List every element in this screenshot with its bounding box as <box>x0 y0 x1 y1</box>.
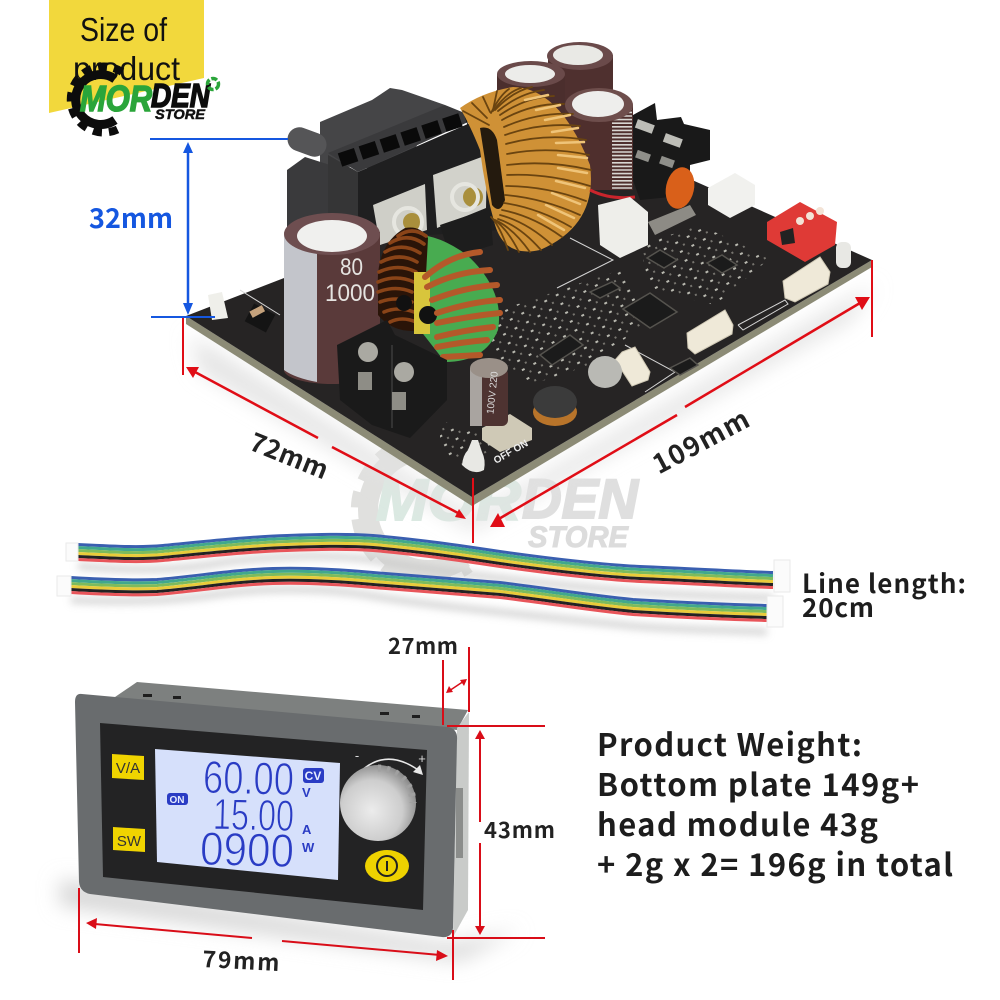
rear terminal block <box>633 103 710 200</box>
white connector with red wire <box>590 190 648 258</box>
small aluminium capacitor <box>588 356 622 388</box>
SW button <box>113 827 145 852</box>
V/A button: V/A <box>116 760 140 777</box>
dimension: 79mm width <box>79 888 453 980</box>
white connectors <box>615 257 830 386</box>
ribbon cables <box>57 534 790 632</box>
nylon standoffs <box>208 242 851 472</box>
label: size of product: product <box>73 50 180 87</box>
watermark: Morden Store: STORE <box>528 521 629 554</box>
LCD readouts: A <box>302 822 312 837</box>
DIP switch <box>767 202 837 262</box>
heatsink <box>284 88 500 240</box>
inductor <box>533 386 577 426</box>
green toroid inductor <box>378 227 500 362</box>
dimension: 43mm height <box>447 726 555 938</box>
silkscreen outlines <box>240 238 788 392</box>
rear housing <box>115 682 468 730</box>
board edge <box>186 260 872 506</box>
text: line length: Line length: <box>802 564 966 601</box>
label: size of product: Size of <box>80 11 168 48</box>
LCD readouts: CV <box>305 769 321 783</box>
LCD readouts: V <box>302 785 311 800</box>
big copper toroid <box>460 87 591 252</box>
MOSFET tabs <box>373 155 493 258</box>
board top surface <box>186 148 872 497</box>
brown small capacitor: 100V 220 <box>485 371 501 415</box>
SMD resistors <box>648 205 696 235</box>
logo: Morden Store: DEN <box>151 77 211 114</box>
text: product weight: + 2g x 2= 196g in total <box>597 840 953 885</box>
slide switch: OFF ON <box>492 438 530 467</box>
watermark: Morden Store <box>355 438 640 582</box>
dimension: 72mm width: 72mm <box>245 422 335 487</box>
LCD readouts <box>167 751 324 877</box>
module shadow <box>60 880 520 960</box>
small parts near left corner <box>245 304 275 332</box>
LCD <box>155 749 340 880</box>
dimension: 79mm width: 79mm <box>202 940 280 978</box>
dimension: 72mm width <box>183 318 473 543</box>
logo: Morden Store: MOR <box>80 78 152 119</box>
label: size of product <box>49 0 204 113</box>
dimension: 27mm depth <box>388 629 469 725</box>
orange capacitor <box>662 165 698 211</box>
display module <box>60 682 520 960</box>
knob: - <box>355 748 359 763</box>
logo: Morden Store <box>71 66 218 132</box>
cable shadows <box>71 556 773 632</box>
text: product weight: Product Weight: <box>597 720 862 765</box>
black inner panel <box>100 723 427 910</box>
dimension: 109mm length: 109mm <box>644 398 755 482</box>
big front capacitor <box>284 213 380 384</box>
V/A button <box>112 754 144 780</box>
brown small capacitor <box>470 358 508 426</box>
big front capacitor: 80 <box>340 254 363 281</box>
front terminal block <box>337 320 447 438</box>
dimension: 32mm height <box>89 139 288 317</box>
SW button: SW <box>117 833 142 850</box>
text: line length: 20cm <box>802 588 874 625</box>
upper cable wires <box>78 534 773 588</box>
big front capacitor: 1000 <box>325 280 375 307</box>
LCD readouts: 15.00 <box>212 790 295 841</box>
housing clips <box>143 694 420 718</box>
LCD readouts: ON <box>170 795 184 806</box>
dimension: 109mm length <box>490 260 872 527</box>
dimension: 27mm depth: 27mm <box>388 629 458 661</box>
watermark: Morden Store: MOR <box>376 468 521 533</box>
dimension: 32mm height: 32mm <box>89 197 173 236</box>
cable connectors <box>57 543 790 627</box>
solder component field <box>440 225 770 470</box>
logo: Morden Store: STORE <box>155 106 206 122</box>
text: product weight: head module 43g <box>597 800 878 845</box>
front bezel <box>75 694 457 937</box>
knob: + <box>418 751 426 766</box>
knob <box>340 748 426 841</box>
text: product weight <box>597 720 953 885</box>
text: line length <box>802 564 966 625</box>
power button <box>365 850 409 882</box>
LCD readouts: 0900 <box>199 822 295 877</box>
LCD readouts: 60.00 <box>202 751 295 805</box>
lower cable wires <box>71 568 767 620</box>
watermark: Morden Store: DEN <box>522 467 640 530</box>
LCD readouts: W <box>302 840 315 855</box>
text: product weight: Bottom plate 149g+ <box>597 760 919 805</box>
white header <box>708 173 755 218</box>
back capacitors <box>497 42 633 190</box>
dimension: 43mm height: 43mm <box>484 813 555 845</box>
ICs <box>540 250 737 375</box>
board shadow <box>190 285 875 530</box>
board photo <box>186 42 875 530</box>
slide switch <box>482 414 532 467</box>
